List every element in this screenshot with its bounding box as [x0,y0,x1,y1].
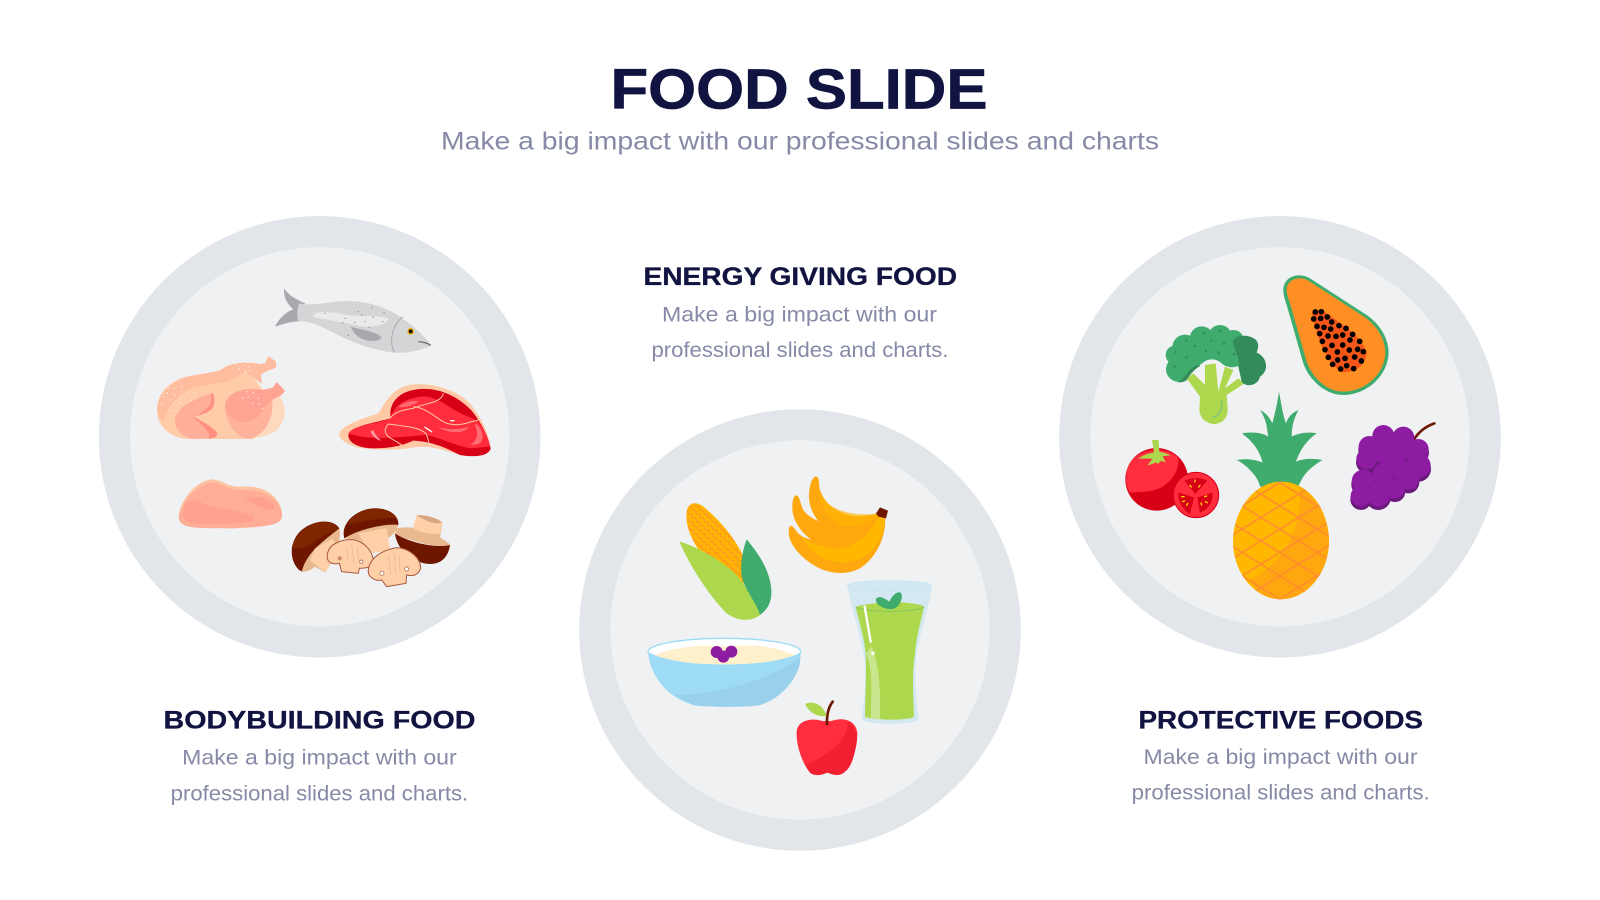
icon: papaya [1283,275,1389,395]
description: protective foods: Make a big impact with our [1144,746,1418,769]
panel: protective foods plate [1059,216,1501,658]
heading: energy giving food: ENERGY GIVING FOOD [644,263,957,291]
description: energy giving food: Make a big impact with our [662,304,937,326]
heading: bodybuilding food: BODYBUILDING FOOD [164,707,476,735]
text block: energy giving food [644,263,957,362]
food icons: energy [648,476,932,775]
icon: pineapple [1233,392,1329,600]
icon: green juice glass [847,581,932,724]
icon: broccoli [1166,325,1266,424]
text block: bodybuilding food [164,707,476,805]
description: bodybuilding food: professional slides and charts. [171,782,468,805]
description: energy giving food: professional slides and charts. [652,339,948,362]
description: protective foods [1132,746,1430,804]
heading: protective foods: PROTECTIVE FOODS [1138,706,1423,734]
icon: berries [711,646,737,663]
description: bodybuilding food: Make a big impact with our [182,746,457,770]
panel: bodybuilding food plate [99,216,540,658]
description: energy giving food [652,304,948,362]
icon: mushrooms [292,508,451,587]
icon: bowl of porridge [648,638,801,707]
panel: energy giving food plate [579,409,1021,851]
food icons: bodybuilding [157,288,491,587]
description: bodybuilding food [171,746,468,805]
text block: protective foods [1132,706,1430,804]
description: protective foods: professional slides and charts. [1132,782,1430,804]
icon: chicken breast [179,479,282,528]
subtitle: Make a big impact with our professional slides and charts [441,128,1159,156]
icon: whole chicken [157,356,285,439]
food icons: protective [1125,275,1436,600]
icon: grapes [1350,423,1434,510]
icon: fish [275,288,432,353]
icon: steak [339,384,491,456]
icon: corn [679,503,771,620]
icon: bananas [789,476,888,573]
icon: tomatoes [1125,440,1219,518]
title: FOOD SLIDE [610,58,988,122]
icon: apple [797,702,857,775]
